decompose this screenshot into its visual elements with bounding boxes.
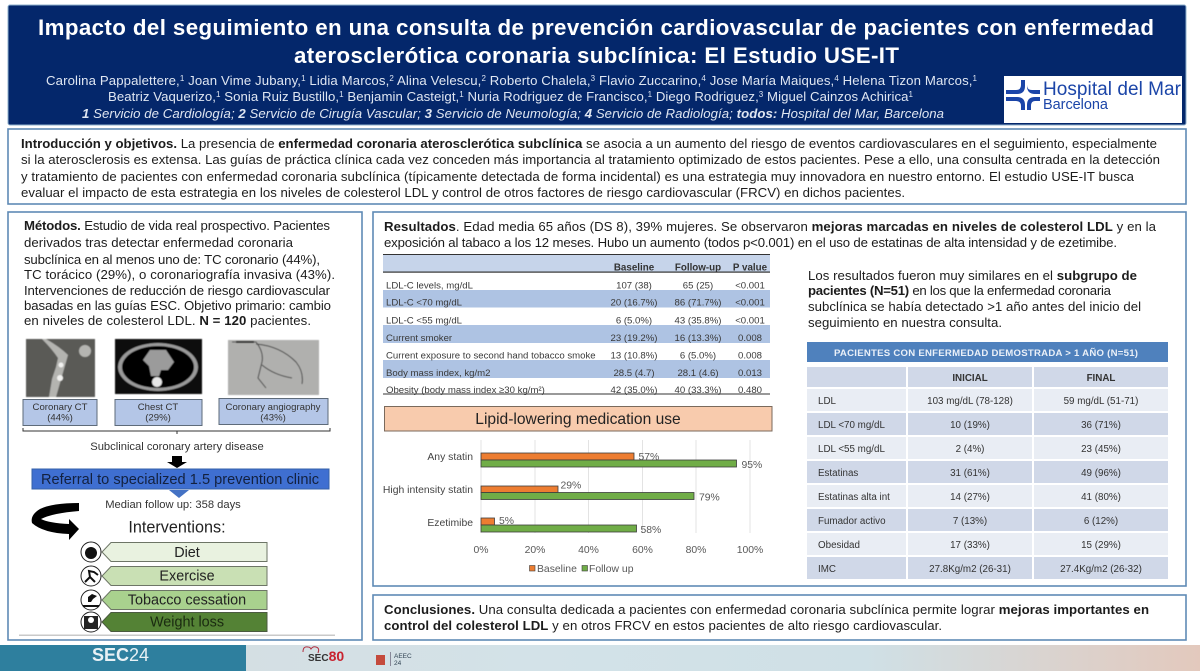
authors and affiliations: 1 xyxy=(301,74,306,83)
bar chart: lipid-lowering medication: 40% xyxy=(578,545,599,556)
authors and affiliations: 1 xyxy=(339,90,344,99)
bar chart: lipid-lowering medication: Any statin xyxy=(427,452,473,463)
table: baseline vs follow-up: 0.008 xyxy=(738,350,762,362)
header banner xyxy=(8,5,1186,125)
table: pacientes con enfermedad demostrada: 23 (45%) xyxy=(1081,444,1121,455)
table: pacientes con enfermedad demostrada: 27.4Kg/m2 (26-32) xyxy=(1060,564,1142,575)
table: pacientes con enfermedad demostrada: 17 (33%) xyxy=(950,540,990,551)
legend xyxy=(530,564,634,575)
table: pacientes con enfermedad demostrada xyxy=(807,342,1168,579)
intervention: weight loss xyxy=(81,612,267,632)
métodos text: TC torácico (29%), o coronariografía invasiva (43%). xyxy=(24,267,335,282)
table: baseline vs follow-up: Baseline xyxy=(614,262,655,274)
bar chart: lipid-lowering medication: 60% xyxy=(632,545,653,556)
footer logo: AEEC xyxy=(376,652,412,667)
table: baseline vs follow-up: 13 (10.8%) xyxy=(611,350,657,362)
modality boxes: Chest CT xyxy=(138,402,178,413)
legend: Follow up xyxy=(589,564,634,575)
table: baseline vs follow-up: Follow-up xyxy=(675,262,721,274)
table: pacientes con enfermedad demostrada: 14 (27%) xyxy=(950,492,990,503)
intervention: exercise: Exercise xyxy=(159,568,215,584)
table: pacientes con enfermedad demostrada: FINAL xyxy=(1087,373,1115,384)
authors and affiliations: Carolina Pappalettere, xyxy=(46,73,180,88)
table: pacientes con enfermedad demostrada: 6 (12%) xyxy=(1084,516,1118,527)
brace xyxy=(23,428,330,434)
table: pacientes con enfermedad demostrada: 103 mg/dL (78-128) xyxy=(927,396,1013,407)
table: baseline vs follow-up: Body mass index, kg/m2 xyxy=(386,368,491,379)
chart heading xyxy=(384,406,772,431)
table: pacientes con enfermedad demostrada: Estatinas alta int xyxy=(818,492,890,503)
bar chart: lipid-lowering medication: 5% xyxy=(499,516,514,527)
panel: introducción y objetivos: si la aterosclerosis es extensa. Las guías de práctica clínica cada vez conceden más importancia al tratamiento optimizado de estos pacientes. Pese a ello, una consulta centrada en la detección xyxy=(21,152,1160,167)
panel: introducción y objetivos: y tratamiento de pacientes con enfermedad coronaria subclínica (típicamente detectada de forma incidental) es una estrategia muy innovadora en nuestro entorno. El estudio USE-IT busca xyxy=(21,169,1135,184)
table: baseline vs follow-up: LDL-C <70 mg/dL xyxy=(386,298,463,308)
modality boxes: Coronary CT xyxy=(33,402,88,413)
panel: conclusiones: Conclusiones. Una consulta dedicada a pacientes con enfermedad coronaria subclínica permite lograr mejoras importantes en xyxy=(384,602,1149,617)
table: baseline vs follow-up: 42 (35.0%) xyxy=(611,385,657,396)
bar chart: lipid-lowering medication: 29% xyxy=(560,480,581,492)
table: baseline vs follow-up: <0.001 xyxy=(735,298,765,308)
logo: Hospital del Mar: Hospital del Mar xyxy=(1043,79,1182,100)
table: baseline vs follow-up: <0.001 xyxy=(735,316,765,326)
modality boxes: Coronary angiography xyxy=(226,402,321,413)
subgroup text: seguimiento en nuestra consulta. xyxy=(808,315,1002,330)
métodos text xyxy=(24,218,335,328)
subgroup text: Los resultados fueron muy similares en el subgrupo de xyxy=(808,268,1137,283)
title: aterosclerótica coronaria subclínica: El Estudio USE-IT xyxy=(294,43,899,68)
panel: conclusiones xyxy=(373,595,1186,640)
panel: métodos xyxy=(8,212,362,640)
authors and affiliations: 1 xyxy=(648,90,653,99)
table: baseline vs follow-up: LDL-C levels, mg/dL xyxy=(386,280,474,292)
arrow: down blue xyxy=(169,490,189,498)
interventions heading: Interventions: xyxy=(128,518,226,536)
authors and affiliations: Beatriz Vaquerizo, xyxy=(108,89,216,104)
table: pacientes con enfermedad demostrada: PACIENTES CON ENFERMEDAD DEMOSTRADA > 1 AÑO (N=51) xyxy=(834,348,1138,359)
authors and affiliations: 3 xyxy=(759,90,764,99)
bar chart: lipid-lowering medication: 79% xyxy=(699,492,720,504)
table: baseline vs follow-up: 6 (5.0%) xyxy=(680,350,716,362)
table: baseline vs follow-up: 28.1 (4.6) xyxy=(677,368,719,379)
métodos text: Métodos. Estudio de vida real prospectivo. Pacientes xyxy=(24,218,330,233)
table: pacientes con enfermedad demostrada: 31 (61%) xyxy=(950,468,990,479)
métodos text: subclínica en al menos uno de: TC coronario (44%), xyxy=(24,252,320,267)
table: baseline vs follow-up: 28.5 (4.7) xyxy=(613,368,655,379)
table: baseline vs follow-up: 107 (38) xyxy=(616,280,652,292)
intervention: diet xyxy=(81,542,267,562)
authors and affiliations: Helena Tizon Marcos, xyxy=(839,73,972,88)
authors and affiliations: 4 xyxy=(834,74,839,83)
authors and affiliations: Sonia Ruiz Bustillo, xyxy=(220,89,339,104)
arrow: curved xyxy=(32,503,79,540)
table: baseline vs follow-up: 43 (35.8%) xyxy=(675,316,721,326)
table: baseline vs follow-up: 65 (25) xyxy=(683,280,713,292)
image: chest CT xyxy=(115,339,202,394)
table: pacientes con enfermedad demostrada: 10 (19%) xyxy=(950,420,990,431)
image: coronary CT xyxy=(26,339,95,397)
table: baseline vs follow-up: LDL-C <55 mg/dL xyxy=(386,316,463,326)
panel: introducción y objetivos: Introducción y objetivos. La presencia de enfermedad coronaria aterosclerótica subclínica se asocia a un aumento del riesgo de eventos cardiovasculares en el seguimiento, especialmente xyxy=(21,136,1157,151)
legend: Baseline xyxy=(537,564,577,575)
logo: Hospital del Mar: Barcelona xyxy=(1043,97,1109,113)
authors and affiliations: Jose María Maiques, xyxy=(706,73,834,88)
footer logo: AEEC: AEEC xyxy=(394,653,412,660)
authors and affiliations: 1 xyxy=(459,90,464,99)
authors and affiliations: Roberto Chalela, xyxy=(486,73,591,88)
table: pacientes con enfermedad demostrada: Estatinas xyxy=(818,468,858,479)
panel: introducción y objetivos xyxy=(8,129,1186,204)
intervention: tobacco cessation: Tobacco cessation xyxy=(128,592,246,608)
bar chart: lipid-lowering medication: 80% xyxy=(686,545,706,556)
table: pacientes con enfermedad demostrada: 59 mg/dL (51-71) xyxy=(1064,396,1138,407)
bar chart: lipid-lowering medication: 95% xyxy=(742,460,762,471)
subgroup text: subclínica se había detectado >1 año antes del inicio del xyxy=(808,299,1141,314)
subgroup text: pacientes (N=51) en los que la enfermedad coronaria xyxy=(808,283,1112,298)
authors and affiliations: 2 xyxy=(481,74,486,83)
métodos text: basadas en las guías ESC. Objetivo primario: cambio xyxy=(24,298,331,313)
table: pacientes con enfermedad demostrada: 2 (4%) xyxy=(956,444,984,455)
table: baseline vs follow-up: 0.013 xyxy=(738,368,762,379)
table: baseline vs follow-up: 0.008 xyxy=(738,333,762,344)
intervention: tobacco cessation xyxy=(81,590,267,610)
authors and affiliations xyxy=(46,73,978,121)
footer band xyxy=(0,645,1200,671)
table: baseline vs follow-up: 40 (33.3%) xyxy=(675,385,721,396)
table: pacientes con enfermedad demostrada: LDL <70 mg/dL xyxy=(818,420,885,431)
table: baseline vs follow-up: Obesity (body mass index ≥30 kg/m²) xyxy=(386,385,545,396)
table: pacientes con enfermedad demostrada: LDL <55 mg/dL xyxy=(818,444,885,455)
panel: introducción y objetivos: evaluar el impacto de esta estrategia en los niveles de colesterol LDL y control de otros factores de riesgo cardiovascular (FRCV) en dichos pacientes. xyxy=(21,185,905,200)
arrow: down black xyxy=(167,456,187,468)
authors and affiliations: Benjamin Casteigt, xyxy=(344,89,459,104)
métodos text: Intervenciones de reducción de riesgo cardiovascular xyxy=(24,283,331,298)
authors and affiliations: 1 xyxy=(973,74,978,83)
authors and affiliations: Alina Velescu, xyxy=(394,73,481,88)
table: pacientes con enfermedad demostrada: 41 (80%) xyxy=(1081,492,1121,503)
intervention: diet: Diet xyxy=(174,545,200,561)
bar chart: lipid-lowering medication: 57% xyxy=(638,452,659,463)
subgroup text xyxy=(808,268,1141,330)
follow up label: Median follow up: 358 days xyxy=(105,499,241,511)
authors and affiliations: 1 xyxy=(180,74,185,83)
bar chart: lipid-lowering medication: 58% xyxy=(640,525,661,536)
authors and affiliations: 2 xyxy=(389,74,394,83)
table: baseline vs follow-up: 16 (13.3%) xyxy=(675,333,721,344)
resultados text: Resultados. Edad media 65 años (DS 8), 39% mujeres. Se observaron mejoras marcadas en niveles de colesterol LDL y en la xyxy=(384,219,1157,234)
chart heading: Lipid-lowering medication use xyxy=(475,411,681,428)
footer logo: SEC 80: SEC80 xyxy=(308,648,344,664)
footer logo: SEC24: SEC24 xyxy=(92,645,149,665)
table: pacientes con enfermedad demostrada: LDL xyxy=(818,396,837,407)
modality boxes: (43%) xyxy=(260,412,286,424)
table: pacientes con enfermedad demostrada: 36 (71%) xyxy=(1081,420,1121,431)
table: pacientes con enfermedad demostrada: INICIAL xyxy=(952,373,988,384)
table: pacientes con enfermedad demostrada: Obesidad xyxy=(818,540,860,551)
table: pacientes con enfermedad demostrada: 15 (29%) xyxy=(1081,540,1121,551)
intervention: exercise xyxy=(81,566,267,586)
bar chart: lipid-lowering medication: 20% xyxy=(525,545,545,556)
table: baseline vs follow-up: Current smoker xyxy=(386,333,453,344)
authors and affiliations: Lidia Marcos, xyxy=(306,73,389,88)
table: baseline vs follow-up: 23 (19.2%) xyxy=(611,333,657,344)
panel: resultados xyxy=(373,212,1186,586)
table: pacientes con enfermedad demostrada: 49 (96%) xyxy=(1081,468,1121,479)
subclinical label: Subclinical coronary artery disease xyxy=(90,441,264,453)
title xyxy=(38,15,1154,68)
footer logo: AEEC: 24 xyxy=(394,660,402,667)
table: pacientes con enfermedad demostrada: 27.8Kg/m2 (26-31) xyxy=(929,564,1011,575)
logo: Hospital del Mar xyxy=(1004,76,1182,123)
bar chart: lipid-lowering medication: High intensity statin xyxy=(383,485,473,496)
table: baseline vs follow-up: 86 (71.7%) xyxy=(675,298,721,308)
authors and affiliations: Diego Rodriguez, xyxy=(652,89,759,104)
table: baseline vs follow-up: 6 (5.0%) xyxy=(616,316,652,326)
modality boxes: (44%) xyxy=(47,412,73,424)
table: pacientes con enfermedad demostrada: 7 (13%) xyxy=(953,516,987,527)
authors and affiliations: 1 Servicio de Cardiología; 2 Servicio de Cirugía Vascular; 3 Servicio de Neumología; 4 Servicio de Radiología; todos: Hospital del Mar, Barcelona xyxy=(82,106,944,121)
bar chart: lipid-lowering medication xyxy=(383,440,763,575)
bar chart: lipid-lowering medication: 100% xyxy=(737,545,763,556)
authors and affiliations: Miguel Cainzos Achirica xyxy=(763,89,909,104)
authors and affiliations: Nuria Rodriguez de Francisco, xyxy=(464,89,648,104)
bar chart: lipid-lowering medication: 0% xyxy=(473,545,489,556)
table: baseline vs follow-up: P value xyxy=(733,262,768,274)
image: coronary angiography xyxy=(228,340,319,395)
title: Impacto del seguimiento en una consulta de prevención cardiovascular de pacientes con enfermedad xyxy=(38,15,1154,40)
resultados text xyxy=(384,219,1157,250)
table: baseline vs follow-up: 0.480 xyxy=(738,385,762,396)
authors and affiliations: 1 xyxy=(216,90,221,99)
table: baseline vs follow-up: <0.001 xyxy=(735,280,765,292)
authors and affiliations: Flavio Zuccarino, xyxy=(595,73,701,88)
panel: conclusiones: control del colesterol LDL y en otros FRCV en estos pacientes de alto riesgo cardiovascular. xyxy=(384,618,942,633)
authors and affiliations: 4 xyxy=(701,74,706,83)
métodos text: en niveles de colesterol LDL. N = 120 pacientes. xyxy=(24,313,311,328)
referral box: Referral to specialized 1.5 prevention clinic xyxy=(41,472,319,488)
métodos text: derivados tras detectar enfermedad coronaria xyxy=(24,235,294,250)
bar chart: lipid-lowering medication: Ezetimibe xyxy=(427,518,473,529)
modality boxes xyxy=(23,398,328,426)
table: baseline vs follow-up xyxy=(383,254,770,396)
table: baseline vs follow-up: 20 (16.7%) xyxy=(611,298,657,308)
authors and affiliations: 1 xyxy=(909,90,914,99)
table: pacientes con enfermedad demostrada: IMC xyxy=(818,564,836,575)
table: baseline vs follow-up: Current exposure to second hand tobacco smoke xyxy=(386,350,596,362)
modality boxes: (29%) xyxy=(145,412,171,424)
intervention: weight loss: Weight loss xyxy=(150,614,224,630)
authors and affiliations: 3 xyxy=(591,74,596,83)
table: pacientes con enfermedad demostrada: Fumador activo xyxy=(818,516,886,527)
resultados text: exposición al tabaco a los 12 meses. Hubo un aumento (todos p<0.001) en el uso de estatinas de alta intensidad y de ezetimibe. xyxy=(384,235,1117,250)
authors and affiliations: Joan Vime Jubany, xyxy=(184,73,301,88)
